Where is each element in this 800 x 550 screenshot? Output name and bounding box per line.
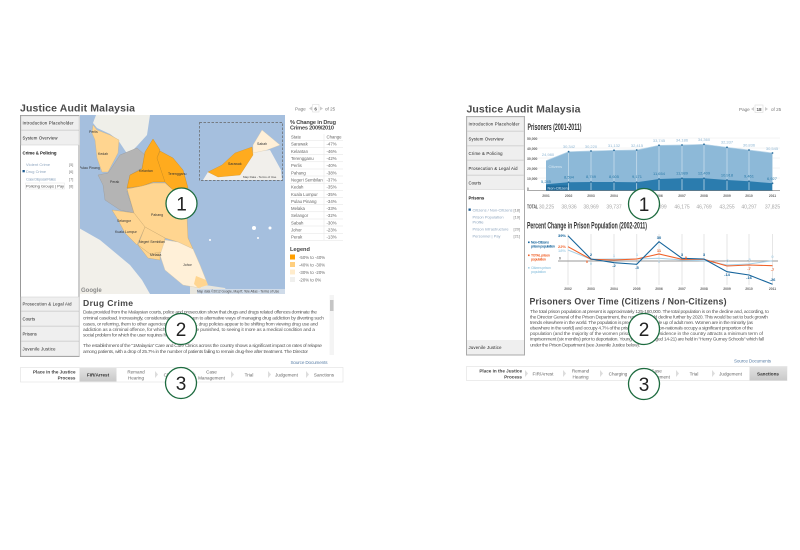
line chart: percent change in prison population: -5: [747, 257, 752, 262]
text block: Drug Crime: criminal caseload. Increasingly, consideration is being given to alternative ways of managing drug addiction by diverting such: [83, 316, 324, 322]
process bar: place in the justice process: FIR/Arrest: [533, 372, 554, 376]
table: % change in drug crimes: -42%: [326, 156, 337, 161]
line chart: percent change in prison population: 1: [636, 252, 639, 257]
page control: right: Page: [739, 107, 750, 112]
area chart: prisoners 2001-2011: 2003: [587, 194, 595, 198]
process bar: place in the justice process: Hearing: [128, 376, 144, 380]
area chart: prisoners 2001-2011: 8,749: [586, 174, 597, 179]
text block: Prisoners Over Time: imprisonment (six months) prior to deportation. Young offenders (aged 14-21) are held in "Henry Gurney Schools" which fall: [530, 336, 764, 342]
area chart: prisoners 2001-2011: 11,989: [676, 170, 689, 176]
text block: Drug Crime: addiction as a criminal offence, for which the user is to be punished, to seeing it more as a medical condition and a: [83, 327, 315, 333]
navigation panel: right: Prison Infrastructure: [472, 226, 508, 232]
page control: right: 18: [756, 107, 762, 112]
navigation panel: right: [20]: [514, 226, 520, 232]
text block: Drug Crime: Data provided from the Malaysian courts, police and prosecution show that drugs and drugs related offences dominate the: [83, 310, 317, 316]
table: % change in drug crimes: Sarawak: [291, 142, 309, 147]
navigation panel: left: Courts: [22, 316, 35, 322]
process bar: place in the justice process: Remand: [572, 368, 590, 374]
text block: Prisoners Over Time: [530, 296, 769, 348]
legend: map colours: -50% to -40%: [299, 255, 325, 260]
process bar: place in the justice process: Sanctions: [757, 372, 779, 376]
area chart: prisoners 2001-2011: 11,654: [653, 171, 666, 176]
table: % change in drug crimes: -35%: [326, 192, 337, 197]
area chart: prisoners 2001-2011: 20,000: [527, 167, 537, 171]
table: % change in drug crimes: -35%: [326, 185, 337, 190]
text block: Drug Crime: The establishment of the "1Malaysia" Care and Cure Clinics across the country shows a significant impact on rates of relapse: [83, 343, 322, 349]
area chart: prisoners 2001-2011: 9,171: [632, 174, 643, 179]
navigation panel: right: Prisons: [468, 196, 485, 200]
area chart: prisoners 2001-2011: 30,545: [766, 146, 779, 151]
line chart: percent change in prison population: -5: [725, 258, 730, 263]
area chart: prisoners 2001-2011: 2001: [542, 194, 550, 198]
area chart: prisoners 2001-2011: 50,000: [527, 137, 537, 141]
choropleth map of Malaysia: Perlis: [89, 130, 98, 134]
navigation panel: left: [7]: [69, 176, 73, 182]
line chart: percent change in prison population: -5: [635, 265, 640, 270]
area chart: prisoners 2001-2011: 30,342: [563, 144, 576, 149]
legend: map colours: -20% to 0%: [299, 278, 321, 282]
process bar: place in the justice process: FIR/Arrest: [87, 372, 110, 378]
process bar: place in the justice process: Case: [206, 370, 217, 374]
table: % change in drug crimes: Pahang: [291, 170, 306, 175]
text block: Drug Crime: [83, 295, 334, 355]
line chart: percent change in prison population: 2011: [769, 287, 776, 291]
callout 1: left: [166, 188, 197, 219]
table: % change in drug crimes: Kelantan: [291, 149, 309, 154]
page control: left: 6: [314, 106, 317, 112]
line chart: percent change in prison population: prison population: [531, 244, 555, 248]
area chart: prisoners 2001-2011: 2011: [769, 194, 776, 198]
choropleth map of Malaysia: Kelantan: [139, 169, 153, 173]
page control: left: [295, 104, 336, 112]
callout 2: left: [166, 314, 196, 344]
text block: Prisoners Over Time: trends elsewhere in the world. The population is predominantly made up of adult men. Women are in the minority (as: [530, 320, 754, 326]
line chart: percent change in prison population: population: [531, 270, 546, 274]
choropleth map of Malaysia: Kedah: [98, 152, 108, 156]
line chart: percent change in prison population: -26: [770, 277, 776, 282]
area chart: prisoners 2001-2011: 40,000: [527, 147, 537, 151]
line chart: percent change in prison population: 18%: [558, 248, 566, 253]
table: % change in drug crimes: State: [291, 134, 302, 140]
callout 2: right: 2: [639, 320, 649, 341]
navigation panel: left: Juvenile Justice: [22, 346, 56, 352]
process bar: place in the justice process: Process: [504, 374, 522, 380]
area chart: prisoners 2001-2011: 41,586: [629, 204, 645, 210]
table: % change in drug crimes: Pulau Pinang: [291, 199, 317, 204]
line chart: percent change in prison population: Citizens prison: [531, 266, 551, 270]
text block: Drug Crime: social problem for which the user requires help.: [83, 332, 173, 338]
area chart: prisoners 2001-2011: 32,415: [631, 143, 644, 148]
choropleth map of Malaysia: [79, 115, 285, 294]
area chart: prisoners 2001-2011: 2007: [678, 194, 686, 198]
table: % change in drug crimes: -32%: [326, 213, 337, 218]
line chart: percent change in prison population: -16: [746, 275, 753, 280]
area chart: prisoners 2001-2011: 30,220: [585, 144, 598, 149]
choropleth map of Malaysia: Pulau Pinang: [79, 166, 100, 170]
table: % change in drug crimes: -46%: [326, 149, 337, 154]
title: right: Justice Audit Malaysia: [466, 103, 581, 115]
line chart: percent change in prison population: 11: [657, 248, 662, 253]
line chart: percent change in prison population: Percent Change in Prison Population (2002-2011): [527, 220, 647, 230]
choropleth map of Malaysia: Pahang: [151, 213, 163, 217]
table: % change in drug crimes: Selangor: [291, 213, 309, 218]
panel: left slide: [20, 103, 343, 398]
table: % change in drug crimes: -37%: [326, 178, 337, 182]
table: % change in drug crimes: -34%: [326, 199, 337, 204]
line chart: percent change in prison population: 2008: [700, 287, 708, 291]
line chart: percent change in prison population: 2003: [587, 287, 595, 291]
area chart: prisoners 2001-2011: 30,000: [527, 157, 537, 161]
choropleth map of Malaysia: Terengganu: [168, 172, 187, 176]
text block: Drug Crime: among patients, with a drop of 25.7% in the number of patients failing to remain drug-free after treatment. The Director: [83, 349, 308, 355]
line chart: percent change in prison population: Non-Citizens: [531, 240, 549, 244]
choropleth map of Malaysia: Selangor: [117, 219, 132, 223]
line chart: percent change in prison population: 2002: [564, 287, 572, 291]
navigation panel: right: Juvenile Justice: [468, 345, 502, 350]
line chart: percent change in prison population: 2006: [655, 287, 663, 291]
table: % change in drug crimes: Johor: [291, 228, 302, 232]
callout 1: right: 1: [639, 195, 649, 216]
line chart: percent change in prison population: TOTAL prison: [531, 254, 550, 258]
area chart: prisoners 2001-2011: 9,461: [744, 174, 755, 178]
table: % change in drug crimes: [290, 120, 343, 240]
navigation panel: right: Courts: [468, 180, 481, 186]
callout 3: right: [628, 368, 660, 400]
process bar: place in the justice process: Process: [58, 376, 76, 380]
navigation panel: right: [19]: [514, 214, 520, 220]
area chart: prisoners 2001-2011: Citizens: [548, 165, 562, 169]
process bar: place in the justice process: Place in the Justice: [479, 368, 522, 374]
table: % change in drug crimes: -30%: [326, 220, 337, 225]
line chart: percent change in prison population: 0: [771, 254, 774, 259]
line chart: percent change in prison population: 3: [681, 252, 684, 257]
page control: right: of 25: [771, 107, 782, 112]
navigation panel: left: Violent Crime: [26, 162, 50, 167]
navigation panel: right: Citizens / Non-Citizens: [472, 208, 513, 212]
choropleth map of Malaysia: Melaka: [150, 253, 161, 257]
table: % change in drug crimes: Kedah: [291, 185, 304, 190]
navigation panel: left: [6]: [69, 169, 73, 174]
area chart: prisoners 2001-2011: 32,337: [721, 140, 734, 144]
area chart: prisoners 2001-2011: 2009: [723, 194, 731, 198]
callout 1: left: 1: [176, 194, 187, 215]
link: source documents: Source Documents: [734, 358, 772, 364]
area chart: prisoners 2001-2011: 6,927: [767, 176, 778, 181]
process bar: place in the justice process: Judgement: [719, 372, 743, 376]
choropleth map of Malaysia: Kuala Lumpur: [115, 230, 138, 234]
area chart: prisoners 2001-2011: 2002: [565, 194, 572, 198]
area chart: prisoners 2001-2011: 2008: [700, 194, 708, 198]
table: % change in drug crimes: Kuala Lumpur: [291, 192, 318, 197]
callout 2: right: [628, 314, 660, 344]
map inset: East Malaysia: Sabah: [257, 142, 267, 146]
navigation panel: left: [20, 116, 79, 356]
legend: map colours: -40% to -30%: [299, 262, 325, 268]
process bar: place in the justice process: Case: [651, 368, 662, 374]
navigation panel: left: Drug Crime: [26, 169, 46, 174]
table: % change in drug crimes: -33%: [326, 206, 337, 211]
line chart: percent change in prison population: 39%: [558, 233, 566, 238]
line chart: percent change in prison population: 1: [658, 259, 661, 264]
process bar: place in the justice process: Remand: [127, 370, 145, 374]
process bar: place in the justice process: Trial: [245, 372, 253, 378]
text block: Prisoners Over Time: the Director General of the Prison Department, the number should decline further by 2020. This would be set to buck growth: [530, 314, 768, 320]
line chart: percent change in prison population: 2009: [723, 287, 731, 291]
choropleth map of Malaysia: Negeri Sembilan: [139, 240, 165, 244]
area chart: prisoners 2001-2011: 33,745: [653, 138, 666, 143]
process bar: place in the justice process: Judgement: [275, 372, 299, 378]
line chart: percent change in prison population: 0: [559, 256, 561, 260]
table: % change in drug crimes: Perak: [291, 235, 303, 240]
area chart: prisoners 2001-2011: 45,399: [651, 204, 667, 210]
table: % change in drug crimes: Melaka: [291, 206, 305, 211]
table: % change in drug crimes: Crimes 2009/2010: [290, 126, 334, 132]
panel: right slide: [466, 103, 787, 400]
area chart: prisoners 2001-2011: 46,175: [674, 204, 690, 210]
process bar: place in the justice process: Trial: [690, 372, 698, 376]
navigation panel: right: Prosecution & Legal Aid: [468, 166, 518, 171]
line chart: percent change in prison population: -14: [724, 272, 731, 277]
table: % change in drug crimes: Terengganu: [291, 156, 314, 161]
area chart: prisoners 2001-2011: 30,225: [539, 204, 554, 210]
area chart: prisoners 2001-2011: 2004: [610, 194, 618, 198]
navigation panel: left: Crime & Policing: [22, 150, 57, 156]
area chart: prisoners 2001-2011: 24,980: [542, 152, 555, 157]
callout 3: left: [166, 368, 196, 398]
table: % change in drug crimes: -40%: [326, 163, 337, 168]
area chart: prisoners 2001-2011: 38,936: [561, 204, 577, 210]
navigation panel: left: [8]: [69, 184, 73, 188]
navigation panel: left: Introduction Placeholder: [22, 120, 74, 126]
process bar: place in the justice process: Management: [198, 376, 226, 380]
line chart: percent change in prison population: 2005: [633, 287, 641, 291]
area chart: prisoners 2001-2011: 8,594: [564, 174, 575, 180]
area chart: prisoners 2001-2011: 43,255: [719, 204, 735, 210]
line chart: percent change in prison population: -2: [612, 263, 617, 268]
process bar: place in the justice process: Sanctions: [314, 372, 335, 378]
line chart: percent change in prison population: 0: [586, 259, 589, 264]
area chart: prisoners 2001-2011: 34,360: [698, 137, 711, 142]
area chart: prisoners 2001-2011: 8,605: [609, 174, 620, 179]
line chart: percent change in prison population: 2: [590, 252, 593, 257]
area chart: prisoners 2001-2011: TOTAL: [527, 204, 538, 210]
callout 2: left: 2: [176, 320, 186, 341]
text block: Prisoners Over Time: under the Prison Department (see Juvenile Justice below).: [530, 342, 640, 348]
area chart: prisoners 2001-2011: 40,297: [741, 204, 757, 210]
line chart: percent change in prison population: 2007: [678, 287, 686, 291]
line chart: percent change in prison population: -7: [747, 266, 752, 271]
title: left: Justice Audit Malaysia: [20, 103, 135, 115]
choropleth map of Malaysia: Google: [81, 288, 102, 294]
navigation panel: left: System Overview: [22, 136, 58, 140]
table: % change in drug crimes: -47%: [326, 142, 337, 147]
callout 3: right: 3: [639, 375, 649, 396]
line chart: percent change in prison population: [527, 220, 778, 291]
area chart: prisoners 2001-2011: 38,969: [583, 204, 599, 210]
choropleth map of Malaysia: Johor: [183, 263, 193, 267]
table: % change in drug crimes: -23%: [326, 228, 337, 232]
area chart: prisoners 2001-2011: 2010: [745, 194, 753, 198]
line chart: percent change in prison population: 1: [613, 253, 616, 258]
process bar: place in the justice process: Hearing: [572, 374, 589, 380]
navigation panel: left: [5]: [69, 162, 73, 167]
area chart: prisoners 2001-2011: 2005: [633, 194, 641, 198]
process bar: place in the justice process: Charging: [164, 372, 183, 378]
area chart: prisoners 2001-2011: 10,000: [527, 177, 537, 181]
map inset: East Malaysia: Sarawak: [228, 162, 242, 166]
table: % change in drug crimes: Sabah: [291, 220, 304, 225]
navigation panel: right: [21]: [514, 234, 520, 238]
choropleth map of Malaysia: Map data ©2012 Google, MapIT, Tele Atlas - Terms of Use: [197, 290, 279, 294]
table: % change in drug crimes: Change: [326, 134, 342, 140]
navigation panel: left: Prosecution & Legal Aid: [22, 302, 72, 306]
navigation panel: left: Prisons: [22, 332, 37, 336]
area chart: prisoners 2001-2011: 39,737: [606, 204, 622, 210]
link: source documents: Source Documents: [290, 360, 328, 365]
line chart: percent change in prison population: 3: [703, 252, 706, 257]
text block: Drug Crime: Drug Crime: [83, 298, 133, 308]
line chart: percent change in prison population: population: [531, 258, 546, 262]
line chart: percent change in prison population: 0: [590, 261, 593, 266]
page control: left: Page: [295, 106, 306, 112]
process bar: place in the justice process: [466, 366, 787, 380]
line chart: percent change in prison population: 0: [685, 255, 688, 260]
text block: Prisoners Over Time: elsewhere in the world) and occupy 4.7% of the prison population. Non-nationals occupy a significant proportion of the: [530, 326, 753, 332]
legend: map colours: -30% to -20%: [299, 270, 325, 275]
table: % change in drug crimes: -13%: [326, 235, 337, 240]
text block: Prisoners Over Time: population (and the majority of the women prisoners). Legal residence in the country attracts a minimum term of: [530, 331, 764, 337]
table: % change in drug crimes: % Change in Drug: [290, 120, 337, 126]
table: % change in drug crimes: -38%: [326, 170, 337, 175]
line chart: percent change in prison population: 2004: [610, 287, 618, 291]
area chart: prisoners 2001-2011: 30,836: [743, 142, 756, 148]
process bar: place in the justice process: Place in the Justice: [33, 370, 76, 374]
navigation panel: left: Case Disposal Rates: [26, 176, 56, 182]
line chart: percent change in prison population: -7: [771, 267, 775, 272]
navigation panel: right: [466, 116, 524, 355]
area chart: prisoners 2001-2011: Non-Citizens: [548, 186, 569, 190]
choropleth map of Malaysia: Perak: [110, 180, 119, 184]
process bar: place in the justice process: Charging: [609, 372, 628, 376]
area chart: prisoners 2001-2011: 34,186: [676, 138, 689, 142]
map inset: East Malaysia: Map Data - Terms of Use: [243, 175, 277, 179]
navigation panel: left: Policing Groups | Pay: [26, 184, 64, 188]
area chart: prisoners 2001-2011: 12,409: [698, 170, 711, 176]
area chart: prisoners 2001-2011: 10,918: [721, 172, 734, 178]
navigation panel: right: [18]: [514, 208, 520, 212]
table: % change in drug crimes: Perlis: [291, 163, 302, 168]
line chart: percent change in prison population: 2010: [745, 287, 753, 291]
legend: map colours: Legend: [290, 247, 310, 253]
page control: left: of 25: [325, 106, 336, 112]
text block: Prisoners Over Time: Prisoners Over Time (Citizens / Non-Citizens): [530, 296, 727, 306]
area chart: prisoners 2001-2011: 2006: [655, 194, 663, 198]
navigation panel: right: Crime & Policing: [468, 151, 503, 156]
area chart: prisoners 2001-2011: 37,825: [765, 204, 780, 210]
area chart: prisoners 2001-2011: Prisoners (2001-2011): [528, 122, 582, 132]
legend: map colours: [290, 247, 325, 282]
text block: Prisoners Over Time: The total prison population at present is approximately 125-180,000. The total population is on the decline and, according, to: [530, 309, 769, 315]
navigation panel: right: Personnel | Pay: [472, 234, 501, 238]
navigation panel: right: Prison Population: [472, 214, 504, 220]
map inset: East Malaysia: [200, 122, 282, 180]
process bar: place in the justice process: [20, 368, 343, 382]
table: % change in drug crimes: Negeri Sembilan: [291, 178, 323, 182]
line chart: percent change in prison population: 30: [657, 235, 662, 240]
callout 3: left: 3: [176, 374, 186, 395]
navigation panel: right: Introduction Placeholder: [468, 122, 520, 126]
area chart: prisoners 2001-2011: 0: [527, 187, 529, 191]
page control: right: [739, 105, 782, 112]
navigation panel: right: System Overview: [468, 136, 504, 142]
area chart: prisoners 2001-2011: 31,132: [608, 143, 621, 148]
area chart: prisoners 2001-2011: [527, 122, 780, 210]
text block: Drug Crime: cases, or referring, them to other agencies. In other words, drug policies appear to be shifting from viewing drug use and: [83, 322, 318, 328]
navigation panel: right: Profile: [472, 220, 484, 224]
process bar: place in the justice process: Management: [643, 374, 671, 380]
area chart: prisoners 2001-2011: 46,769: [696, 204, 712, 210]
line chart: percent change in prison population: 22%: [558, 244, 566, 249]
area chart: prisoners 2001-2011: 5,245: [541, 179, 552, 184]
callout 1: right: [628, 188, 660, 220]
